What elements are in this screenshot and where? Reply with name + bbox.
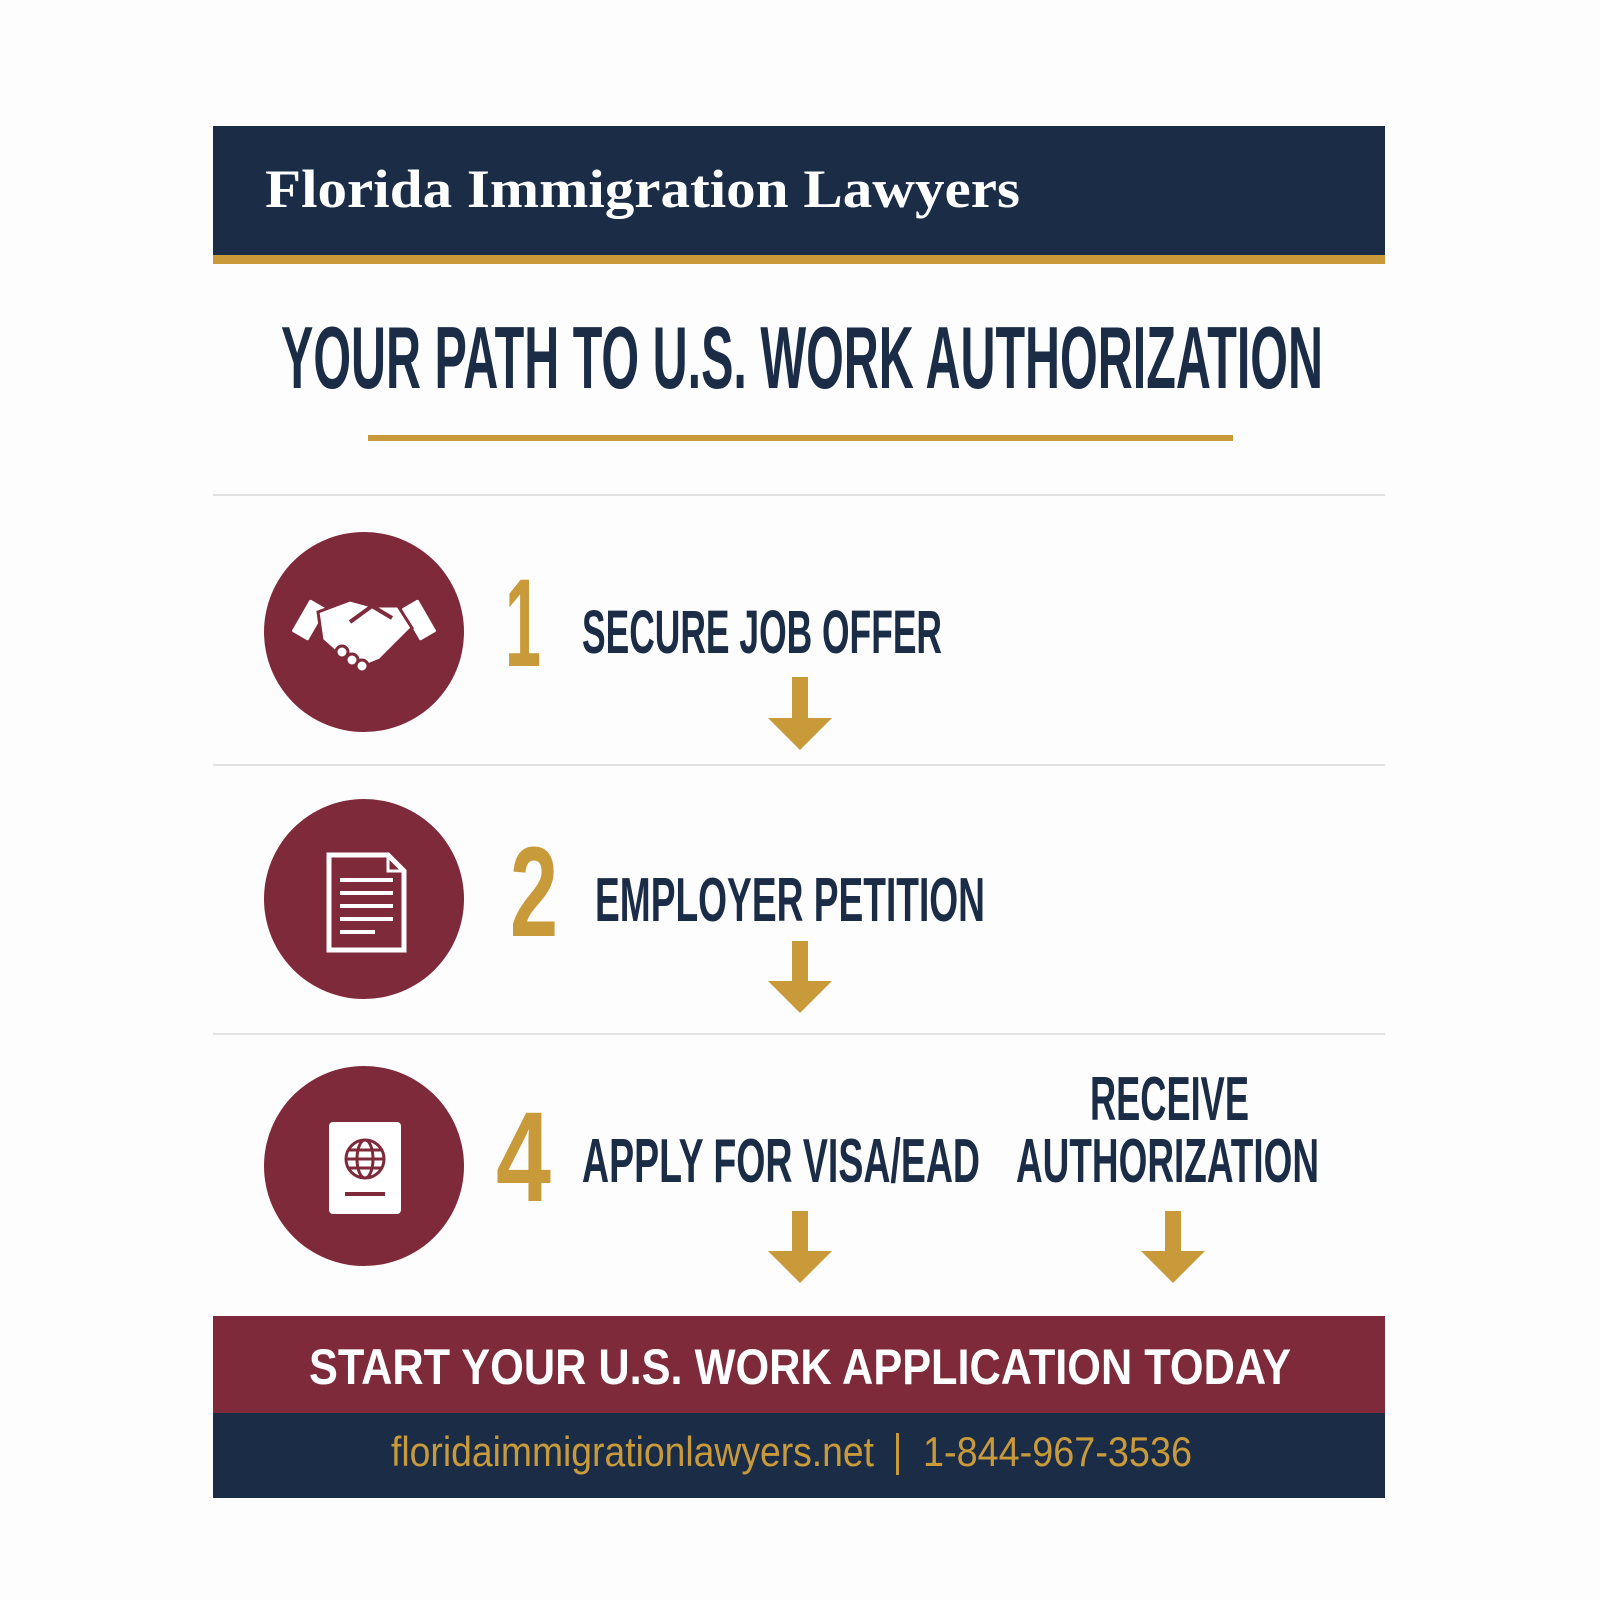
step 4 [264, 1065, 1319, 1283]
arrow [768, 1211, 832, 1283]
icon: handshake [264, 532, 464, 732]
label: apply: APPLY FOR VISA/EAD [582, 1127, 980, 1196]
label: EMPLOYER PETITION [595, 866, 985, 935]
header band [213, 126, 1385, 264]
footer contact [213, 1413, 1385, 1498]
icon: document [264, 799, 464, 999]
arrow [768, 941, 832, 1013]
step 2 [264, 799, 985, 1013]
footer contact: 1-844-967-3536 [923, 1428, 1192, 1475]
footer contact: floridaimmigrationlawyers.net [391, 1428, 874, 1475]
header title: Florida Immigration Lawyers [265, 159, 1020, 219]
label: receive authorization [1016, 1065, 1319, 1196]
footer CTA: START YOUR U.S. WORK APPLICATION TODAY [309, 1339, 1291, 1395]
number 1: 1 [505, 554, 541, 693]
title underline [368, 435, 1233, 441]
arrow [768, 677, 832, 750]
number 2: 2 [510, 821, 558, 964]
label: receive authorization: RECEIVE [1090, 1065, 1249, 1134]
label: SECURE JOB OFFER [582, 598, 942, 666]
icon: passport [264, 1066, 464, 1266]
arrow [1141, 1211, 1205, 1283]
step 1 [264, 532, 942, 750]
footer CTA [213, 1316, 1385, 1413]
number 4: 4 [496, 1086, 551, 1229]
label: receive authorization: AUTHORIZATION [1016, 1127, 1319, 1196]
